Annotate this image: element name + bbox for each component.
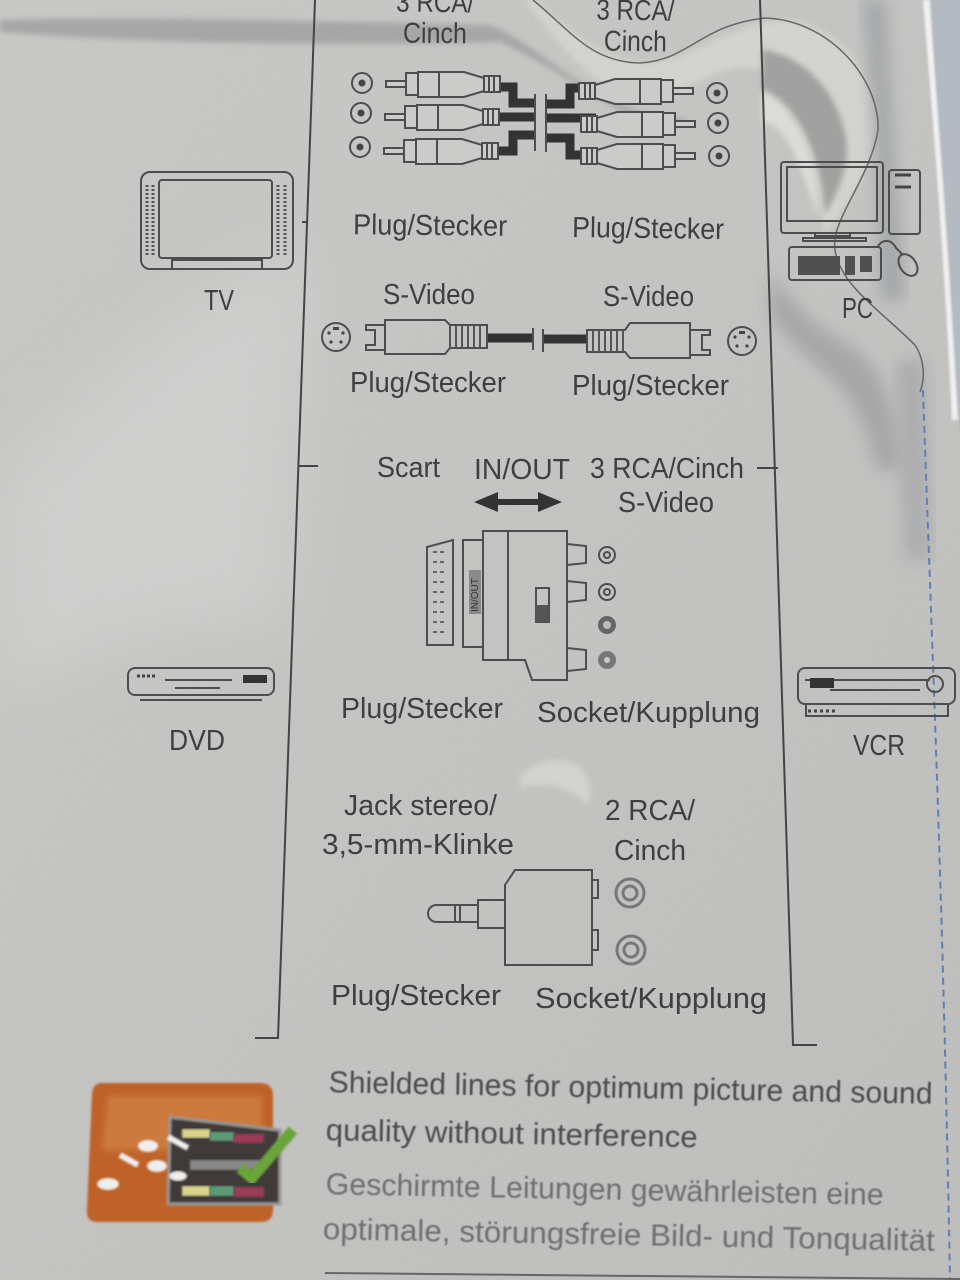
label: 2 RCA: Cinch xyxy=(614,835,686,867)
label: S-Video left: S-Video xyxy=(383,279,475,311)
diagram: jack adapter xyxy=(428,870,645,965)
label: 2 RCA xyxy=(605,795,696,867)
label: plug: Plug/Stecker xyxy=(341,693,503,725)
label: plug right: Plug/Stecker xyxy=(572,370,729,402)
label: socket: Socket/Kupplung xyxy=(537,697,760,729)
text block: German description: optimale, störungsfreie Bild- und Tonqualität xyxy=(323,1211,935,1258)
right edge of packaging xyxy=(923,0,960,1280)
text block: English description: quality without interference xyxy=(325,1112,698,1154)
icon: TV xyxy=(141,172,293,269)
plastic blister shadows and reflections xyxy=(0,0,932,805)
diagram: Scart adapter xyxy=(427,531,616,680)
label: socket: Socket/Kupplung xyxy=(535,983,767,1015)
label: TV: TV xyxy=(204,285,235,317)
plastic outline curve xyxy=(533,0,923,392)
heading: 3 RCA left xyxy=(396,0,475,50)
label: DVD: DVD xyxy=(169,725,225,757)
icon: PC xyxy=(781,162,921,280)
text block: English description: Shielded lines for optimum picture and sound xyxy=(328,1064,933,1111)
text block: English description xyxy=(325,1064,933,1159)
label: plug left: Plug/Stecker xyxy=(350,367,506,399)
text block: German description xyxy=(323,1166,936,1258)
arrow: in/out xyxy=(474,492,562,512)
heading: 3 RCA right xyxy=(596,0,675,59)
text block: German description: Geschirmte Leitungen gewährleisten eine xyxy=(325,1166,884,1212)
diagram: S-Video cable xyxy=(322,320,756,358)
label: 3 RCA/Cinch S-Video xyxy=(590,453,744,519)
heading: 3 RCA left: Cinch xyxy=(403,18,467,50)
label: Scart: Scart xyxy=(377,452,440,484)
heading: 3 RCA right: Cinch xyxy=(604,26,667,58)
frame ticks xyxy=(299,222,778,468)
label: S-Video right: S-Video xyxy=(603,281,694,313)
label: jack stereo: 3,5-mm-Klinke xyxy=(322,829,514,861)
label: 3 RCA/Cinch S-Video: S-Video xyxy=(618,487,714,519)
label: plug right: Plug/Stecker xyxy=(572,212,725,246)
label: 2 RCA: 2 RCA/ xyxy=(605,795,696,827)
label: VCR: VCR xyxy=(853,730,905,762)
label: 3 RCA/Cinch S-Video: 3 RCA/Cinch xyxy=(590,453,744,485)
label: plug left: Plug/Stecker xyxy=(353,209,508,243)
frame: right bracket xyxy=(760,0,817,1045)
label: plug: Plug/Stecker xyxy=(331,980,501,1012)
icon: VCR xyxy=(798,668,955,716)
diagram: RCA cable xyxy=(350,72,729,169)
frame: left bracket xyxy=(255,0,315,1038)
diagram: Scart adapter: IN/OUT xyxy=(470,578,481,612)
label: jack stereo xyxy=(322,790,514,861)
icon: orange badge with TV and music notes xyxy=(87,1083,293,1222)
label: IN/OUT: IN/OUT xyxy=(474,454,570,486)
label: jack stereo: Jack stereo/ xyxy=(344,790,498,822)
label: PC: PC xyxy=(842,293,873,325)
icon: DVD player xyxy=(128,668,274,700)
